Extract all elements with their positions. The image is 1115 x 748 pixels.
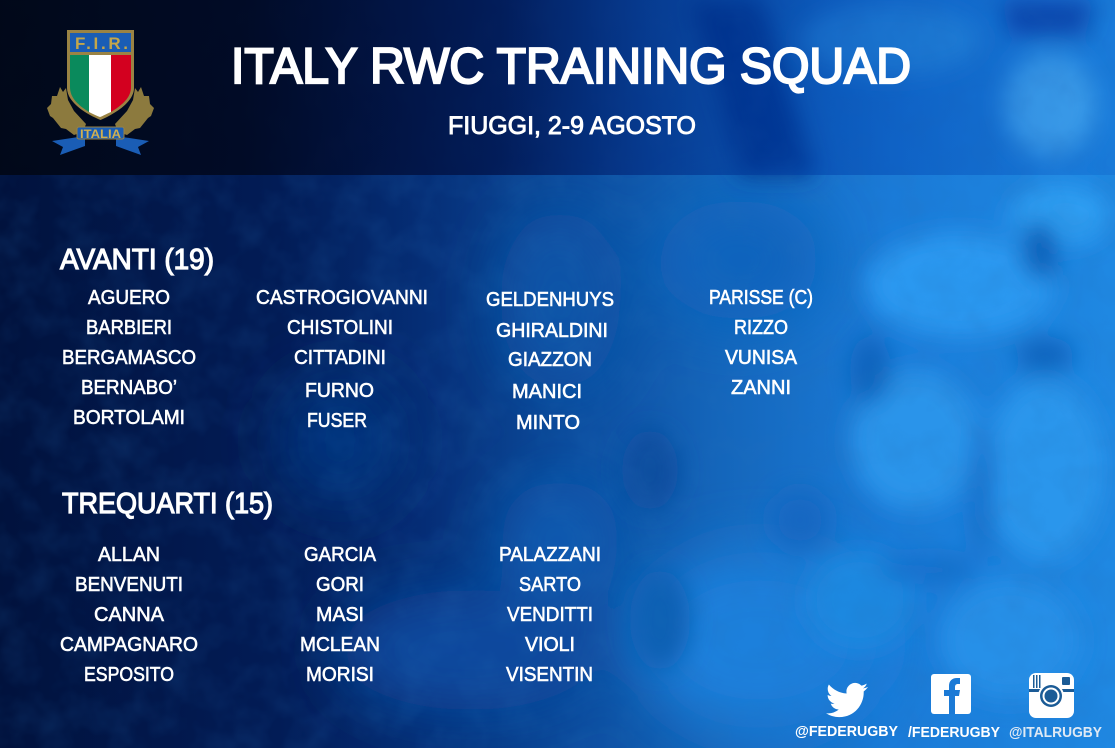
column: trequarti 2: MASI: [316, 604, 364, 626]
subtitle: FIUGGI, 2-9 AGOSTO: [448, 112, 696, 140]
column: avanti 4: [709, 287, 813, 399]
column: avanti 4: VUNISA: [725, 347, 798, 369]
logo: F.I.R. crest: ITALIA: [80, 127, 121, 141]
column: avanti 3: MANICI: [512, 381, 582, 403]
column: avanti 2: FURNO: [305, 380, 374, 402]
social: instagram: [1009, 673, 1102, 741]
icon: shield: [67, 30, 134, 120]
social: instagram: @ITALRUGBY: [1009, 724, 1102, 741]
column: trequarti 2: GARCIA: [304, 544, 377, 566]
column: avanti 1: BARBIERI: [86, 317, 172, 339]
column: avanti 4: ZANNI: [731, 377, 791, 399]
column: trequarti 3: VISENTIN: [506, 664, 593, 686]
column: avanti 1: [62, 287, 196, 429]
column: avanti 3: [486, 289, 614, 434]
social: twitter: @FEDERUGBY: [795, 723, 898, 740]
header band: dark strip: [0, 0, 1115, 175]
column: trequarti 2: GORI: [316, 574, 364, 596]
column: trequarti 3: PALAZZANI: [499, 544, 601, 566]
column: avanti 2: CASTROGIOVANNI: [256, 287, 428, 309]
column: avanti 1: BERNABO’: [81, 377, 177, 399]
heading: trequarti: TREQUARTI (15): [62, 488, 273, 520]
icon: instagram camera: [1029, 673, 1074, 718]
column: avanti 1: AGUERO: [88, 287, 170, 309]
social: twitter: [795, 683, 898, 740]
panel: avanti: [60, 244, 813, 434]
column: trequarti 2: MCLEAN: [300, 634, 380, 656]
column: avanti 3: GELDENHUYS: [486, 289, 614, 311]
column: trequarti 3: SARTO: [519, 574, 581, 596]
icon: right laurel: [115, 87, 154, 135]
column: avanti 1: BERGAMASCO: [62, 347, 196, 369]
column: avanti 2: FUSER: [307, 410, 367, 432]
column: trequarti 1: ALLAN: [98, 544, 160, 566]
column: avanti 3: GIAZZON: [508, 349, 592, 371]
column: avanti 2: CITTADINI: [294, 347, 386, 369]
column: avanti 4: RIZZO: [734, 317, 788, 339]
column: avanti 4: PARISSE (C): [709, 287, 813, 309]
logo: F.I.R. crest: F.I.R.: [75, 34, 128, 53]
column: trequarti 1: CAMPAGNARO: [60, 634, 198, 656]
column: trequarti 1: BENVENUTI: [75, 574, 183, 596]
column: trequarti 3: [499, 544, 601, 686]
title: ITALY RWC TRAINING SQUAD: [231, 38, 911, 94]
column: trequarti 3: VENDITTI: [507, 604, 593, 626]
column: avanti 1: BORTOLAMI: [73, 407, 185, 429]
column: avanti 3: MINTO: [516, 412, 580, 434]
icon: left laurel: [47, 87, 86, 135]
column: trequarti 1: ESPOSITO: [84, 664, 174, 686]
icon: F.I.R. band: [70, 33, 131, 52]
heading: avanti: AVANTI (19): [60, 244, 214, 276]
social: facebook: /FEDERUGBY: [908, 724, 1000, 741]
icon: ribbon tails: [52, 136, 149, 155]
column: trequarti 2: MORISI: [306, 664, 374, 686]
logo: F.I.R. crest: [47, 30, 154, 155]
column: avanti 2: [256, 287, 428, 432]
column: trequarti 3: VIOLI: [525, 634, 575, 656]
social: facebook: [908, 674, 1000, 741]
icon: ITALIA ribbon: [77, 127, 124, 139]
column: avanti 2: CHISTOLINI: [287, 317, 393, 339]
column: avanti 3: GHIRALDINI: [496, 320, 608, 342]
icon: twitter bird: [826, 683, 868, 717]
panel: trequarti: [60, 488, 601, 686]
column: trequarti 2: [300, 544, 380, 686]
icon: Italian tricolour: [70, 55, 131, 117]
icon: facebook square: [931, 674, 971, 714]
column: trequarti 1: [60, 544, 198, 686]
column: trequarti 1: CANNA: [94, 604, 165, 626]
